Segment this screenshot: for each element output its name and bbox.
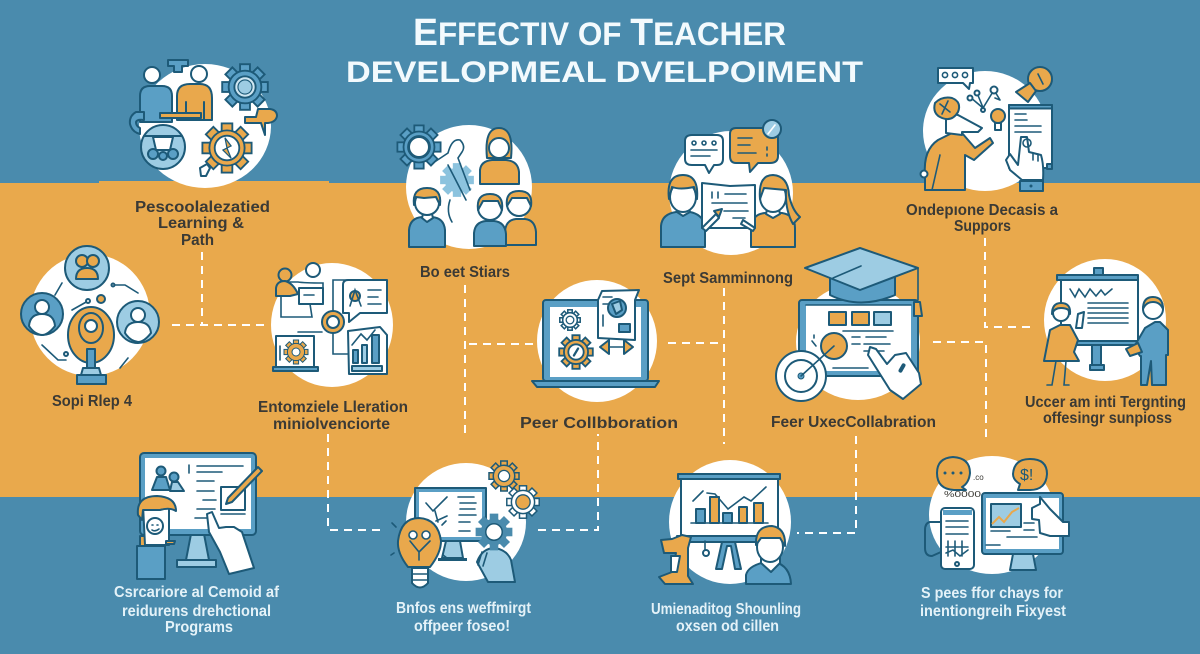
icon: pencil (226, 467, 262, 504)
label: speed for chays: S pees ffor chays for (921, 585, 1063, 602)
icon: blue gear (397, 125, 441, 169)
panel: umienaditog shounling (659, 460, 791, 584)
label: ondepione decasis (906, 202, 1058, 235)
label: personalized learning path: Path (181, 232, 214, 249)
panel: personalized learning path (130, 60, 277, 188)
icon: group circle (65, 246, 109, 290)
icon: chart document (348, 327, 387, 374)
icon: graduation cap (805, 248, 922, 316)
icon: white speech bubble (685, 135, 723, 173)
icon: smartphone (925, 508, 974, 569)
panel: entomziele lleration (271, 263, 393, 387)
label: uccer am inti (1025, 394, 1186, 427)
icon: woman (480, 128, 519, 184)
icon: left person circle (21, 293, 63, 335)
icon: right person circle (117, 301, 159, 343)
icon: desktop monitor (140, 453, 256, 567)
panel: bnfos ens (391, 461, 539, 588)
icon: right student (751, 175, 800, 247)
icon: network lines (42, 283, 138, 368)
icon: person with hair (137, 496, 176, 579)
icon: dotted orange bubble: .co (973, 473, 984, 482)
icon: thumbs up hand (1032, 497, 1069, 536)
icon: small gear (560, 310, 580, 330)
icon: three students (409, 188, 536, 247)
title: DEVELOPMEAL DVELPOIMENT (346, 56, 863, 89)
label: bnfos ens: Bnfos ens weffmirgt (396, 600, 531, 617)
label: ondepione decasis: Ondepıone Decasis a (906, 202, 1058, 219)
icon: man presenter (1126, 297, 1168, 385)
icon: small hand (200, 164, 210, 176)
label: bnfos ens (396, 600, 531, 635)
icon: paper with globe (598, 290, 639, 340)
icon: trophy (1016, 67, 1052, 102)
label: feer uxeccollabration: Feer UxecCollabration (771, 414, 936, 431)
label: personalized learning path: Pescoolalezatied (135, 199, 270, 216)
panel: best starts (397, 125, 536, 249)
icon: orange gesturing arm (659, 535, 709, 584)
icon: dollar speech bubble (1013, 459, 1047, 490)
panel: sept samminnong (661, 120, 800, 255)
icon: presenter (746, 526, 791, 584)
label: speed for chays: inentiongreih Fixyest (920, 603, 1066, 620)
label: best starts: Bo eet Stiars (420, 264, 510, 281)
label: ondepione decasis: Suppors (954, 218, 1011, 235)
icon: tablet (1009, 105, 1052, 169)
label: monitor programs (114, 584, 280, 636)
panel: peer collaboration (532, 280, 659, 402)
icon: monitor with chart (415, 488, 486, 561)
dashed connector lines (172, 238, 1032, 533)
icon: orange dial pointer (776, 333, 847, 401)
icon: woman presenter (1044, 303, 1084, 385)
panel: monitor programs (137, 453, 262, 579)
label: entomziele lleration: Entomziele Lleration (258, 399, 408, 416)
icon: left student (661, 175, 705, 247)
icon: pointing hand (207, 512, 254, 574)
label: entomziele lleration (258, 399, 408, 433)
label: uccer am inti: Uccer am inti Tergnting (1025, 394, 1186, 411)
icon: orange speech bubble (730, 128, 778, 172)
label: monitor programs: Programs (165, 619, 233, 636)
icon: orange pointer (245, 109, 277, 135)
icon: presentation board (1057, 268, 1138, 370)
icon: pointing hand (868, 347, 921, 399)
label: peer collaboration: Peer Collbboration (520, 415, 678, 432)
icon: tablet screen (799, 300, 918, 376)
label: personalized learning path (135, 199, 270, 249)
icon: magnifier (763, 120, 781, 138)
icon: double arrow (600, 340, 633, 354)
label: bnfos ens: offpeer foseo! (414, 618, 510, 635)
icon: laptop (532, 300, 659, 387)
icon: orange connector node (298, 311, 348, 354)
panel: feer uxeccollabration (776, 248, 922, 401)
label: monitor programs: reidurens drehctional (122, 603, 271, 620)
icon: chart board (677, 474, 780, 569)
icon: dollar speech bubble: $! (1020, 467, 1033, 484)
label: speed for chays (920, 585, 1066, 620)
icon: dotted speech bubble (938, 68, 973, 89)
icon: orange gear (202, 123, 252, 173)
label: entomziele lleration: miniolvenciorte (273, 416, 390, 433)
background: orange band (0, 181, 1200, 497)
panel: ondepione decasis (920, 67, 1052, 191)
icon: orange gears (489, 461, 539, 518)
icon: laptop with gear (273, 336, 318, 371)
title: EFFECTIV OF TEACHER (413, 12, 786, 54)
icon: lightbulb (391, 518, 447, 588)
label: sept samminnong: Sept Samminnong (663, 270, 793, 287)
icon: profile card (343, 280, 387, 322)
icon: pointing hand (1006, 137, 1043, 191)
icon: person with gear head (476, 514, 515, 582)
icon: teacher with brain (920, 98, 993, 190)
icon: figures at workstation (276, 263, 358, 317)
label: monitor programs: Csrcariore al Cemoid af (114, 584, 280, 601)
label: umienaditog shounling: oxsen od cillen (676, 618, 779, 635)
label: uccer am inti: offesingr sunpioss (1043, 410, 1172, 427)
icon: blue badge (141, 125, 185, 169)
icon: desktop with chart (982, 493, 1063, 570)
icon: orange gear (559, 335, 593, 369)
icon: light gear with figure (436, 140, 473, 222)
label: umienaditog shounling: Umienaditog Shounling (651, 601, 801, 618)
icon: dotted orange bubble: %0000 (944, 490, 982, 499)
icon: dotted orange bubble (937, 457, 984, 499)
panel: uccer am inti (1044, 259, 1168, 385)
icon: blue gear (222, 64, 268, 110)
label: sopi rlep 4: Sopi Rlep 4 (52, 393, 132, 410)
label: umienaditog shounling (651, 601, 801, 635)
panel: speed for chays (925, 456, 1069, 574)
icon: two people at a desk (130, 60, 212, 134)
label: personalized learning path: Learning & (158, 215, 244, 232)
icon: bulb (991, 109, 1005, 130)
panel: sopi rlep 4 (21, 246, 159, 384)
icon: shared document (702, 183, 755, 231)
icon: molecule network (968, 86, 1000, 112)
icon: lightbulb on stand (68, 307, 114, 384)
title (346, 12, 863, 89)
